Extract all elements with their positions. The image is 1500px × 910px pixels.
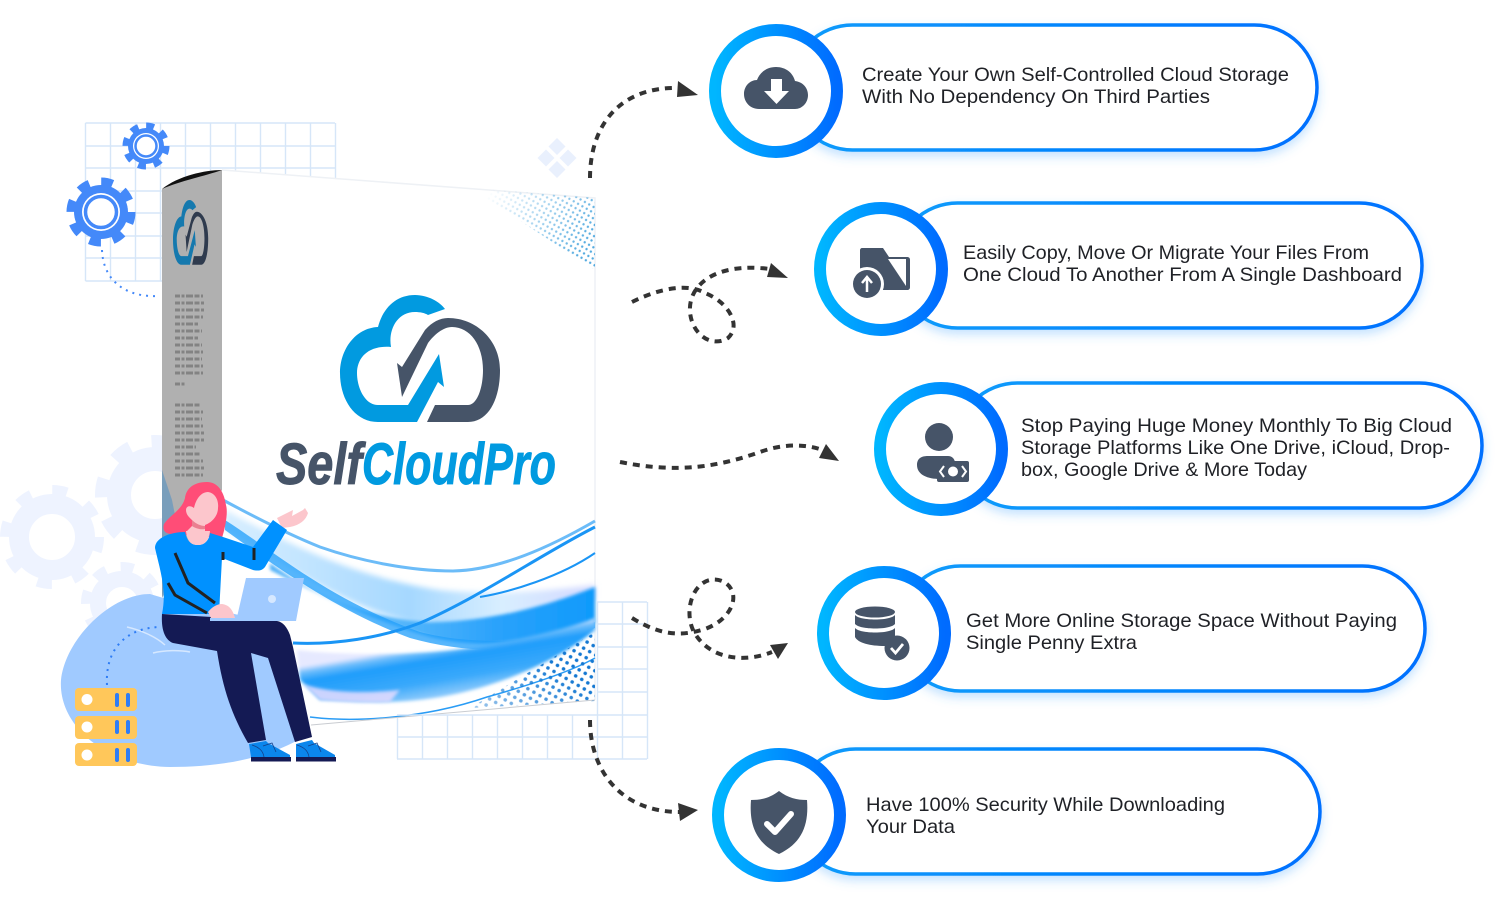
icon: database check: [855, 606, 910, 660]
pill 4: [898, 566, 1425, 691]
ring 3: [880, 388, 1002, 510]
icon: shield check: [751, 791, 807, 854]
icon: folder upload: [850, 248, 910, 301]
beanbag highlights: [127, 627, 190, 653]
text 2: One Cloud To Another From A Single Dashboard: [963, 264, 1402, 286]
item 5: [718, 749, 1320, 876]
grid: top left: [86, 123, 336, 281]
dotted connector: gear to box: [102, 250, 160, 296]
halftone bottom right: [470, 632, 595, 708]
box top sliver: [162, 170, 222, 189]
hand on laptop: [208, 604, 235, 618]
blue gear small: [126, 126, 166, 166]
ring 2: [820, 208, 942, 330]
text 1: With No Dependency On Third Parties: [862, 86, 1210, 108]
arrow 5: [590, 720, 698, 821]
logo wordmark: [276, 432, 556, 497]
pale background gears: [5, 442, 208, 639]
pill 5: [793, 749, 1320, 874]
item 4: [823, 566, 1425, 694]
product box: [162, 170, 595, 725]
ring 4: [823, 572, 945, 694]
ring 1: [715, 30, 837, 152]
text 5: Have 100% Security While Downloading: [866, 794, 1225, 816]
arrow 2: [632, 263, 788, 341]
hair: [163, 482, 227, 538]
text 3: Stop Paying Huge Money Monthly To Big Cloud: [1021, 415, 1452, 437]
grid: bottom right: [397, 602, 648, 759]
text 1: Create Your Own Self-Controlled Cloud Storage: [862, 64, 1289, 86]
box bottom edge: [311, 700, 595, 725]
box front face: [222, 170, 595, 725]
item 3: [880, 383, 1482, 510]
arrow 4: [632, 579, 788, 659]
face and neck: [186, 492, 218, 532]
logo wordmark: Self: [276, 432, 367, 497]
logo wordmark: CloudPro: [362, 432, 556, 497]
arrow 1: [590, 81, 698, 178]
beanbag: [61, 594, 298, 767]
side wave: [162, 470, 178, 598]
hand raised: [277, 508, 308, 528]
ring 5: [718, 754, 840, 876]
text 5: Your Data: [866, 816, 955, 838]
laptop: [210, 578, 304, 621]
blue gear large: [71, 182, 131, 242]
side logo: [173, 200, 208, 265]
arrow 3: [620, 444, 839, 468]
text 4: Single Penny Extra: [966, 632, 1137, 654]
dotted connector: server: [107, 627, 160, 685]
icon: cloud download: [744, 67, 808, 109]
woman on beanbag illustration: [61, 482, 336, 767]
waves: [223, 500, 595, 719]
shoe right: [296, 740, 336, 762]
icon: person with money: [917, 423, 969, 482]
text 4: Get More Online Storage Space Without Paying: [966, 610, 1397, 632]
pill 2: [895, 203, 1422, 328]
logo: cloud with arrows: [340, 295, 500, 422]
chest skin: [186, 531, 210, 545]
item 1: [715, 25, 1317, 152]
laptop logo: [268, 595, 276, 603]
collar shadow: [192, 520, 205, 529]
shoe left: [249, 741, 291, 762]
logo blue cloud: [340, 295, 445, 422]
text 3: Storage Platforms Like One Drive, iCloud, Drop-: [1021, 437, 1450, 459]
halftone top right: [492, 190, 595, 269]
box side panel: [162, 170, 222, 598]
side text lines: [175, 296, 204, 475]
text 3: box, Google Drive & More Today: [1021, 459, 1307, 481]
trousers: [162, 614, 312, 743]
item 2: [820, 203, 1422, 330]
diamonds decoration: [538, 138, 576, 178]
text 2: Easily Copy, Move Or Migrate Your Files From: [963, 242, 1369, 264]
pill 3: [955, 383, 1482, 508]
logo dark cloud: [397, 318, 500, 422]
pill 1: [790, 25, 1317, 150]
sweater seams: [168, 548, 254, 613]
torso and arm: [155, 520, 287, 614]
server stack: [75, 688, 137, 766]
